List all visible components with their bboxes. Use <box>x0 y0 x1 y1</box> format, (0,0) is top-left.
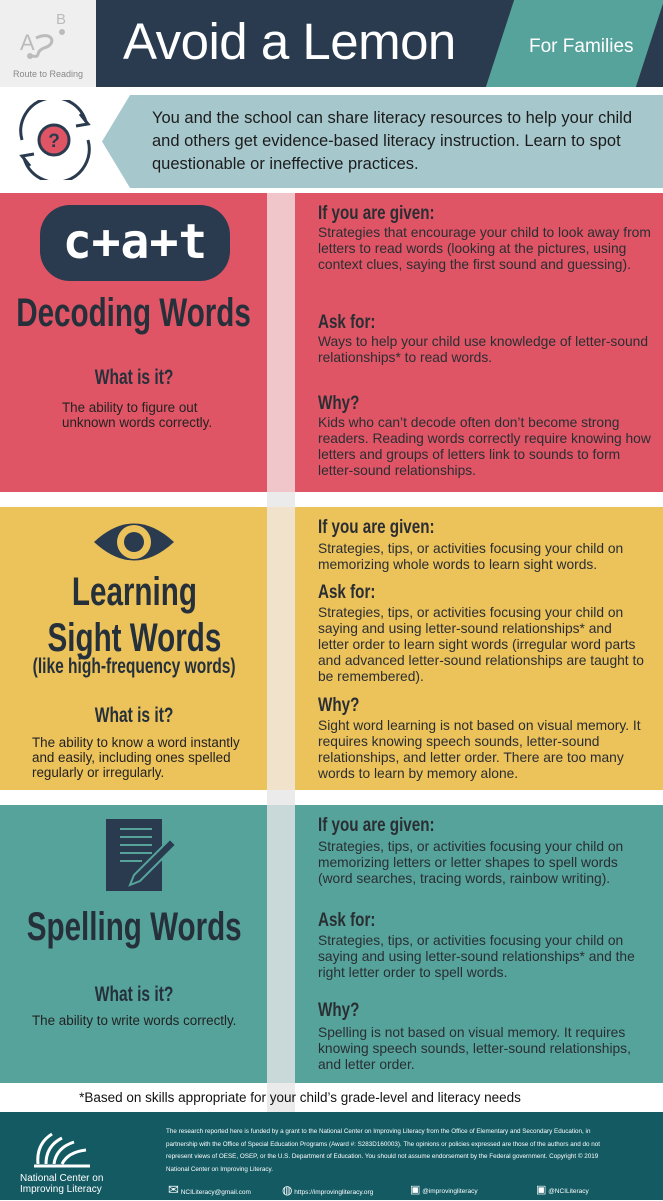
icon: eye <box>94 524 174 560</box>
footer logo <box>20 1132 103 1195</box>
footer text: The research reported here is funded by a grant to the National Center on Improving Literacy from the Office of Elementary and Secondary Education, in partnership with the Office of Special Education Programs (Award #: S283D160003). The opinions or policies expressed are those of the authors and do not represent views of OESE, OSEP, or the U.S. Department of Education. You should not assume endorsement by the Federal government. Copyright © 2019 National Center on Improving Literacy. <box>166 1128 600 1172</box>
header: logo box: Route to Reading <box>13 69 83 79</box>
footnote: *Based on skills appropriate for your child’s grade-level and literacy needs <box>79 1090 521 1105</box>
panel: sight words: If you are given: <box>318 517 435 538</box>
panel: decoding words: Kids who can’t decode often don’t become strong readers. Reading words correctly require knowing how letters and groups of letters link to sounds to form letter-sound relationships. <box>318 415 651 478</box>
panel: spelling words: What is it? <box>95 983 173 1006</box>
intro icon: question cycle <box>19 100 91 180</box>
panel: sight words: Strategies, tips, or activities focusing your child on saying and using letter-sound relationships* and letter order to learn sight words (irregular word parts and advanced letter-sound relationships are taught to be remembered). <box>318 605 644 684</box>
panel: sight words: Why? <box>318 695 359 716</box>
panel: sight words: The ability to know a word instantly and easily, including ones spelled regularly or irregularly. <box>32 735 240 780</box>
icon: c+a+t pill <box>40 205 230 281</box>
intro banner <box>102 95 663 188</box>
panel: decoding words: Why? <box>318 393 359 414</box>
panel: sight words: Sight word learning is not based on visual memory. It requires knowing speech sounds, letter-sound relationships, and letter order. There are too many words to learn by memory alone. <box>318 718 641 781</box>
title: Avoid a Lemon <box>123 13 456 70</box>
panel: sight words: Strategies, tips, or activities focusing your child on memorizing whole words to learn sight words. <box>318 541 623 572</box>
panel: sight words: Sight Words <box>47 616 221 660</box>
panel: spelling words: Strategies, tips, or activities focusing your child on saying and using letter-sound relationships* and the right letter order to spell words. <box>318 933 635 980</box>
panel: sight words: What is it? <box>95 704 173 727</box>
intro icon: question cycle: ? <box>48 131 60 152</box>
panel: decoding words: The ability to figure out unknown words correctly. <box>62 400 212 430</box>
panel: sight words: Ask for: <box>318 582 375 603</box>
panel: spelling words: If you are given: <box>318 815 435 836</box>
subtitle: For Families <box>529 36 634 57</box>
icon: route to reading: A <box>20 30 35 55</box>
icon: route to reading: B <box>56 11 66 28</box>
footer contacts: ▣ @NCILiteracy <box>536 1184 589 1196</box>
panel: decoding words: Ask for: <box>318 312 375 333</box>
heading: Decoding Words <box>17 291 251 335</box>
panel: spelling words: Spelling is not based on visual memory. It requires knowing speech sounds, letter-sound relationships, and letter order. <box>318 1025 631 1072</box>
panel: decoding words: What is it? <box>95 366 173 389</box>
icon: route to reading <box>20 11 66 59</box>
intro text: You and the school can share literacy resources to help your child and others get evidence-based literacy instruction. Learn to spot questionable or ineffective practices. <box>152 109 632 173</box>
icon: notebook and pencil <box>106 819 174 891</box>
panel: sight words: (like high-frequency words) <box>33 655 235 678</box>
given: If you are given: <box>318 203 435 224</box>
footer contacts <box>168 1182 589 1197</box>
panel: sight words <box>0 507 663 790</box>
panel: spelling words: The ability to write words correctly. <box>32 1013 236 1028</box>
icon: c+a+t pill: c+a+t <box>63 214 207 270</box>
panel: spelling words <box>0 805 663 1083</box>
panel: spelling words: Spelling Words <box>27 905 241 949</box>
panel: decoding words: Ways to help your child use knowledge of letter-sound relationships* to read words. <box>318 334 648 365</box>
footer contacts: ◍ https://improvingliteracy.org <box>282 1183 373 1197</box>
header: logo box <box>0 0 96 87</box>
footer logo: National Center on Improving Literacy <box>20 1173 103 1195</box>
panel: spelling words: Strategies, tips, or activities focusing your child on memorizing letters or letter shapes to spell words (word searches, tracing words, rainbow writing). <box>318 839 623 886</box>
panel: decoding words: Strategies that encourage your child to look away from letters to read words (looking at the pictures, using context clues, saying the first sound and guessing). <box>318 225 651 272</box>
header: title bar <box>96 0 663 87</box>
footer <box>0 1112 663 1200</box>
panel: sight words: Learning <box>72 570 196 614</box>
panel: spelling words: Ask for: <box>318 910 375 931</box>
vertical stripe <box>267 193 295 1113</box>
panel: spelling words: Why? <box>318 1000 359 1021</box>
footer contacts: ✉ NCILiteracy@gmail.com <box>168 1182 251 1197</box>
teal parallelogram <box>486 0 663 87</box>
panel: decoding words <box>0 193 663 492</box>
footer contacts: ▣ @improvingliteracy <box>410 1184 478 1196</box>
